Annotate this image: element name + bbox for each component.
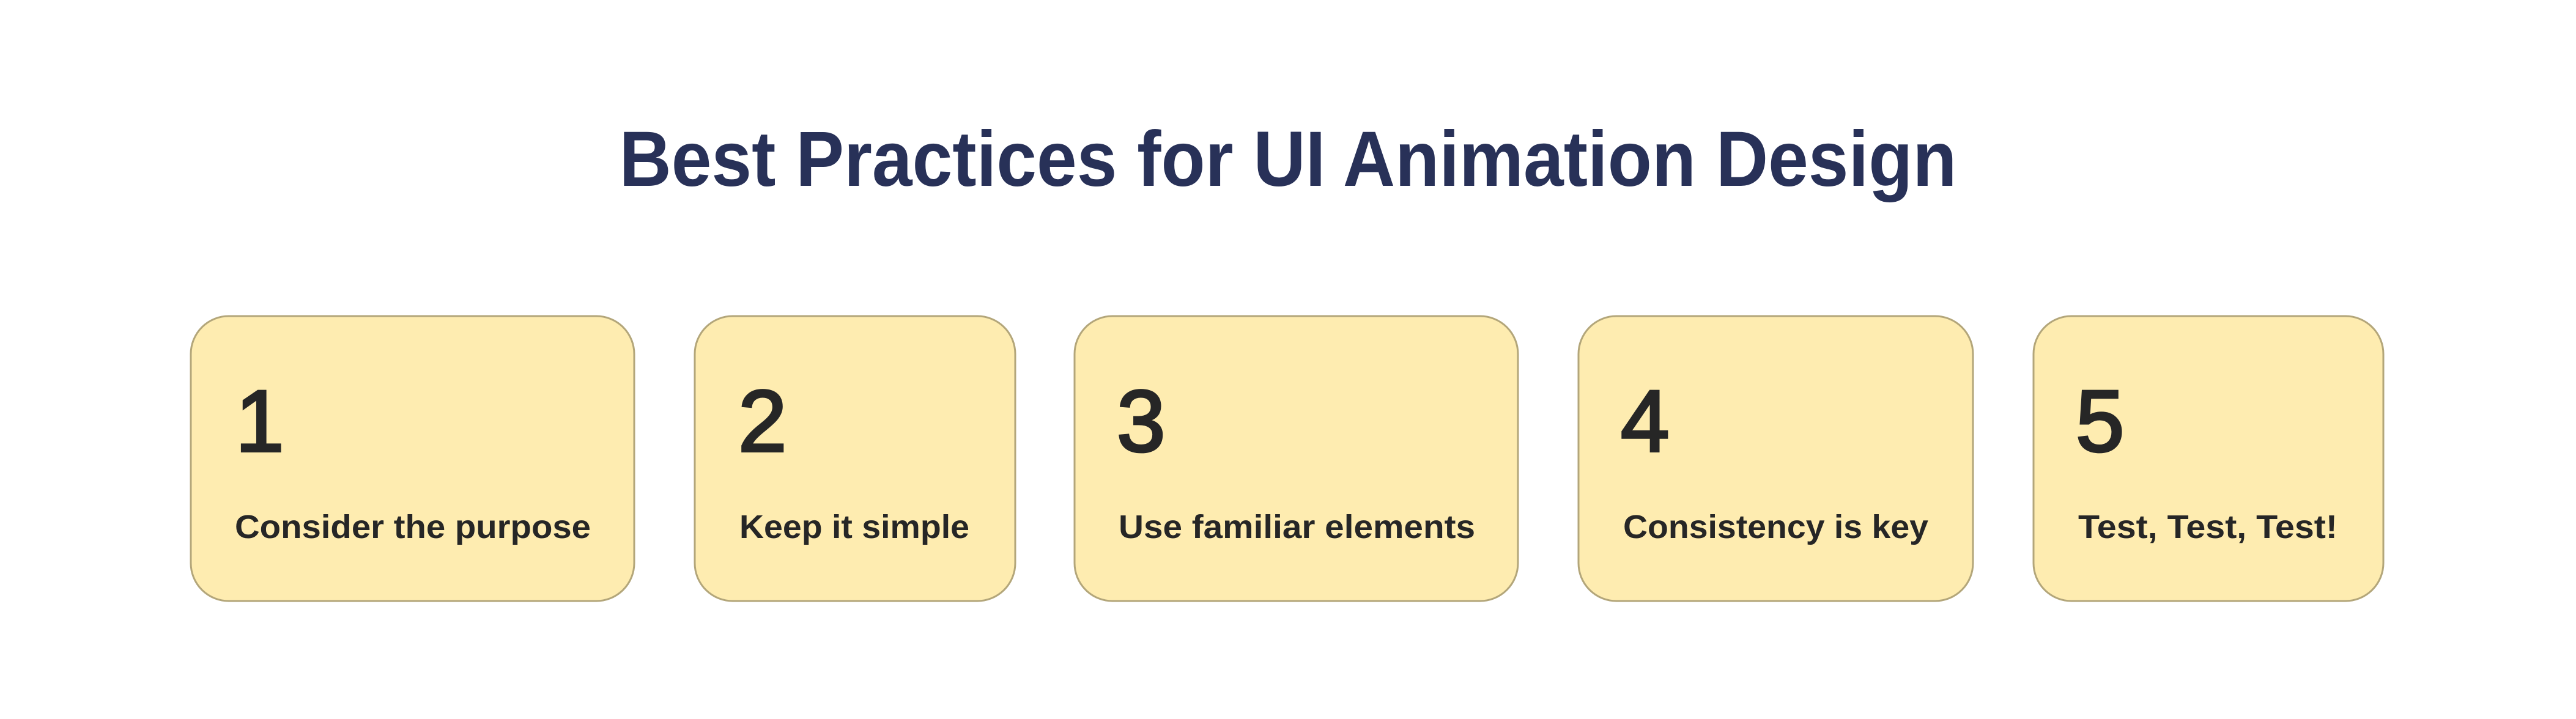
label 2: Keep it simple (739, 509, 969, 545)
card 2: Keep it simple (695, 316, 1015, 601)
title: Best Practices for UI Animation Design (619, 116, 1957, 203)
label 3: Use familiar elements (1119, 509, 1475, 545)
number 2: 2 (738, 373, 787, 470)
card 5: Test, Test, Test! (2034, 316, 2383, 601)
label 5: Test, Test, Test! (2078, 509, 2337, 545)
number 3: 3 (1117, 373, 1166, 470)
card 3: Use familiar elements (1075, 316, 1518, 601)
number 5: 5 (2076, 373, 2125, 470)
number 4: 4 (1621, 373, 1670, 470)
label 4: Consistency is key (1623, 509, 1928, 545)
number 1: 1 (235, 373, 284, 470)
label 1: Consider the purpose (235, 509, 591, 545)
card 1: Consider the purpose (191, 316, 634, 601)
card 4: Consistency is key (1579, 316, 1973, 601)
